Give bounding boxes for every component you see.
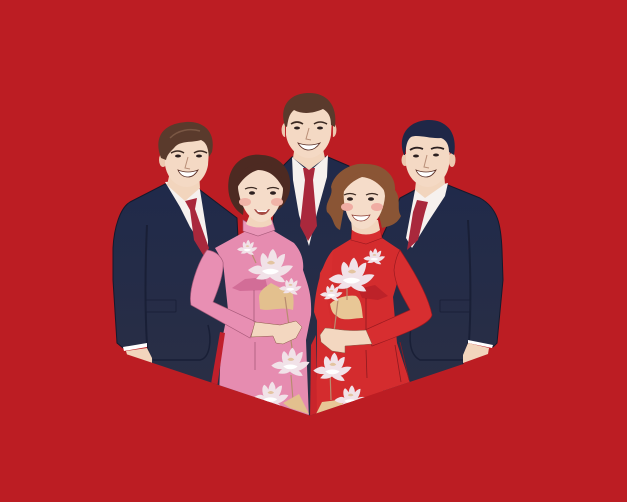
right man hand bbox=[463, 343, 489, 363]
pink hair back bbox=[228, 155, 290, 215]
right man bbox=[382, 120, 504, 391]
right man ears bbox=[402, 154, 406, 166]
pink dress bbox=[215, 231, 311, 420]
left man hand bbox=[126, 348, 152, 363]
center man features bbox=[291, 122, 327, 150]
right man neck bbox=[415, 176, 445, 198]
center man suit bbox=[272, 156, 352, 416]
left man hair bbox=[158, 122, 213, 160]
left man suit bbox=[112, 184, 238, 392]
right man face bbox=[406, 136, 450, 182]
pink flowers bbox=[237, 240, 310, 414]
red hands bbox=[320, 328, 372, 353]
left man tie bbox=[185, 198, 209, 258]
right man pocket bbox=[440, 300, 470, 312]
pink bodice fold bbox=[232, 277, 268, 291]
pink fringe bbox=[236, 163, 284, 190]
pink features bbox=[239, 188, 283, 215]
left man sleeve crease bbox=[146, 225, 147, 345]
left man ear bbox=[159, 155, 166, 167]
center man face bbox=[286, 109, 332, 152]
pink collar bbox=[243, 220, 275, 236]
left man jacket hem bbox=[153, 325, 210, 360]
center man bbox=[272, 93, 352, 416]
right man hair bbox=[402, 120, 455, 155]
right man shirt bbox=[406, 183, 448, 248]
right man sleeve crease bbox=[468, 220, 470, 342]
pink skirt red trim bbox=[211, 332, 225, 388]
left man pocket bbox=[146, 300, 176, 312]
red left sleeve bbox=[314, 250, 333, 335]
left man face bbox=[165, 140, 209, 182]
left man cuff bbox=[123, 343, 147, 351]
family portrait illustration bbox=[112, 93, 504, 416]
red flowers bbox=[313, 248, 385, 414]
pink centre seam bbox=[254, 290, 255, 370]
right man features bbox=[410, 148, 444, 177]
left man shirt bbox=[165, 182, 208, 245]
right man tie bbox=[407, 200, 428, 250]
red left stripe bbox=[310, 335, 317, 420]
red collar bbox=[351, 228, 382, 244]
right man jacket hem bbox=[410, 331, 463, 360]
pink neck bbox=[246, 214, 272, 227]
red features bbox=[341, 194, 383, 221]
center man neck bbox=[293, 151, 325, 170]
center man shirt bbox=[292, 155, 328, 246]
pink right sleeve bbox=[190, 250, 256, 338]
center man ears bbox=[282, 123, 336, 137]
red woman bbox=[310, 164, 432, 420]
left man bbox=[112, 122, 238, 392]
left man features bbox=[171, 151, 207, 177]
right man cuff bbox=[468, 340, 493, 348]
red hair bbox=[326, 164, 401, 230]
left man neck bbox=[167, 176, 200, 201]
red neck bbox=[351, 220, 380, 234]
red seams bbox=[366, 298, 409, 382]
center man tie bbox=[300, 168, 317, 241]
center man hair bbox=[283, 93, 335, 127]
pink face bbox=[238, 168, 283, 222]
red face bbox=[344, 176, 385, 229]
pink woman bbox=[190, 155, 311, 420]
pink hands bbox=[251, 321, 302, 344]
red dress bbox=[316, 238, 411, 420]
left man hair highlight bbox=[170, 130, 200, 138]
red right sleeve bbox=[365, 250, 432, 346]
red fringe bbox=[342, 172, 387, 195]
right man suit bbox=[382, 183, 504, 391]
red bodice fold bbox=[358, 285, 388, 300]
